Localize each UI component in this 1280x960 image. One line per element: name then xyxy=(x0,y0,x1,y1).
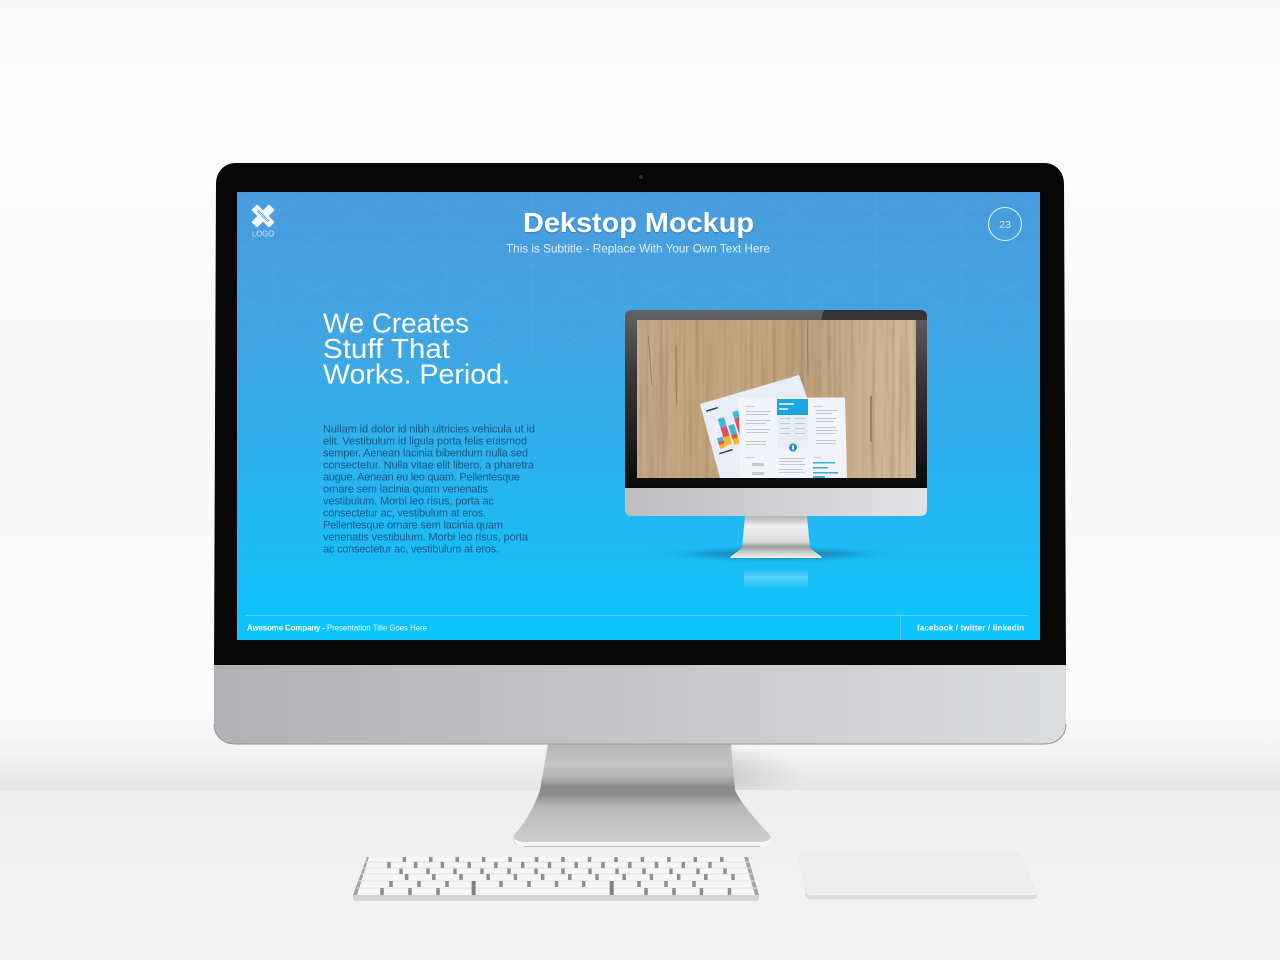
slide title: Dekstop Mockup xyxy=(523,207,754,238)
slide subtitle: This is Subtitle - Replace With Your Own Text Here xyxy=(506,242,770,256)
footer company text: Awesome Company - xyxy=(247,624,325,632)
background: desk xyxy=(0,790,1280,960)
body paragraph: ac consectetur ac, vestibulum at eros. xyxy=(323,544,499,556)
footer social links: facebook / twitter / linkedin xyxy=(917,624,1024,632)
heading: We Creates xyxy=(323,308,469,338)
slide logo: LOGO xyxy=(252,230,274,238)
body paragraph: consectetur ac, vestibulum at eros. xyxy=(323,508,486,520)
footer presentation title: Presentation Title Goes Here xyxy=(327,624,428,632)
mini photo xyxy=(637,320,916,478)
monitor stand xyxy=(513,744,771,846)
body paragraph: Pellentesque ornare sem lacinia quam xyxy=(323,520,503,532)
mini monitor illustration xyxy=(625,310,927,588)
wall shadow behind stand xyxy=(732,751,780,790)
body paragraph: venenatis vestibulum. Morbi leo risus, porta xyxy=(323,532,529,544)
mini stand reflection xyxy=(744,570,808,588)
mini chin xyxy=(625,488,927,516)
background triangle pattern xyxy=(237,192,1040,442)
heading: Works. Period. xyxy=(323,358,510,390)
body paragraph: consectetur. Nulla vitae elit libero, a pharetra xyxy=(323,460,535,472)
heading: Stuff That xyxy=(323,333,450,364)
mini bezel xyxy=(625,310,927,488)
body paragraph: Nullam id dolor id nibh ultricies vehicula ut id xyxy=(323,424,535,436)
body paragraph: elit. Vestibulum id ligula porta felis euismod xyxy=(323,436,527,448)
paper text lines xyxy=(745,406,838,475)
slide logo xyxy=(251,204,275,238)
mini shadow xyxy=(644,545,908,563)
body paragraph: semper. Aenean lacinia bibendum nulla sed xyxy=(323,448,528,460)
body paragraph: augue. Aenean eu leo quam. Pellentesque xyxy=(323,472,520,484)
body paragraph: ornare sem lacinia quam venenatis xyxy=(323,484,488,496)
keyboard xyxy=(353,857,759,901)
page number badge: 23 xyxy=(999,219,1011,231)
mini stand xyxy=(730,516,822,558)
body paragraph: vestibulum. Morbi leo risus, porta ac xyxy=(323,496,494,508)
monitor chin xyxy=(214,665,1066,744)
monitor bezel xyxy=(214,163,1066,665)
screen slide xyxy=(237,192,1040,640)
heading xyxy=(323,308,510,390)
camera xyxy=(639,175,643,179)
desktop monitor xyxy=(214,163,1066,744)
keyboard key gaps xyxy=(382,857,733,895)
body paragraph xyxy=(323,424,535,556)
page number badge xyxy=(988,208,1022,240)
bar chart on rear paper xyxy=(717,410,740,449)
footer xyxy=(246,615,1028,640)
rear paper xyxy=(700,375,808,478)
trackpad xyxy=(797,853,1037,899)
front paper xyxy=(739,398,847,478)
